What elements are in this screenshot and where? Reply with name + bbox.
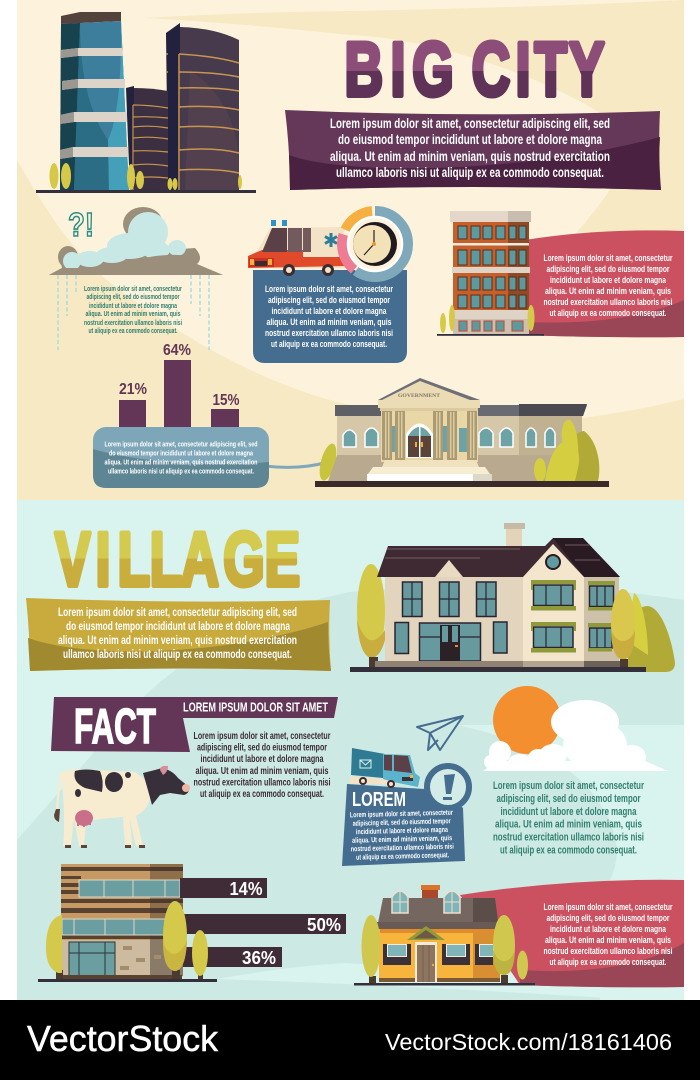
bar chart: horizontal percent bars: 50% <box>307 915 341 935</box>
bar chart: percent bars: 15% <box>212 392 240 409</box>
illustration: delivery truck <box>350 748 420 788</box>
text: fact body: incididunt ut labore et dolore magna <box>200 754 324 765</box>
footer: watermark bar <box>0 1000 700 1080</box>
bar chart: percent bars: 21% <box>119 381 147 398</box>
footer: watermark bar: VectorStock.com/18161406 <box>385 1029 672 1055</box>
banner: fact heading: LOREM IPSUM DOLOR SIT AMET <box>183 700 328 714</box>
text: cloud caption <box>84 284 182 335</box>
banner: big city intro: aliqua. Ut enim ad minim veniam, quis nostrud exercitation <box>330 149 610 164</box>
banner: village intro <box>26 598 331 671</box>
illustration: skyscrapers <box>36 12 256 193</box>
card: ambulance text: aliqua. Ut enim ad minim veniam, quis <box>266 316 392 327</box>
illustration: flat-roof building <box>61 864 183 980</box>
panel: village background <box>17 500 684 1000</box>
text: cloud caption: ut aliquip ex ea commodo consequat. <box>88 326 178 335</box>
banner: village intro: Lorem ipsum dolor sit amet, consectetur adipiscing elit, sed <box>58 605 297 619</box>
illustration: cottage <box>354 885 535 986</box>
illustration: cow <box>54 766 190 848</box>
banner: village intro: aliqua. Ut enim ad minim veniam, quis nostrud exercitation <box>58 633 297 647</box>
text: sun caption <box>493 780 644 856</box>
illustration: government building <box>315 378 609 487</box>
text: fact body: aliqua. Ut enim ad minim veniam, quis <box>196 766 329 777</box>
text: cloud caption: incididunt ut labore et dolore magna <box>89 301 178 310</box>
bar chart: horizontal percent bars: 14% <box>230 879 262 899</box>
banner: big city intro: do eiusmod tempor incididunt ut labore et dolore magna <box>338 132 602 147</box>
illustration: sun behind cloud <box>483 686 668 771</box>
card: chart text: do eiusmod tempor incididunt ut labore et dolore magna <box>109 448 254 458</box>
card: chart text <box>93 427 269 488</box>
card: lorem notice: ut aliquip ex ea commodo consequat. <box>356 850 449 862</box>
banner: fact heading: FACT <box>74 700 156 754</box>
card: ambulance text: Lorem ipsum dolor sit amet, consectetur <box>265 283 393 294</box>
text: fact body: ut aliquip ex ea commodo consequat. <box>200 789 324 800</box>
card: ambulance text: adipiscing elit, sed do eiusmod tempor <box>268 294 390 305</box>
card: lorem notice: Lorem ipsum dolor sit amet, consectetur <box>350 808 453 819</box>
footer: watermark bar: VectorStock <box>27 1018 219 1059</box>
text: cloud caption: Lorem ipsum dolor sit amet, consectetur <box>84 284 182 293</box>
text: cloud caption: nostrud exercitation ullamco laboris nisi <box>84 318 182 327</box>
card: lorem notice: aliqua. Ut enim ad minim veniam, quis <box>352 833 452 845</box>
illustration: trees and ground by flat building <box>38 901 217 982</box>
card: lorem notice: incididunt ut labore et dolore magna <box>356 825 449 836</box>
text: fact body: Lorem ipsum dolor sit amet, consectetur <box>194 731 331 742</box>
text: fact body <box>194 731 331 800</box>
card: ambulance text: ut aliquip ex ea commodo consequat. <box>271 338 387 349</box>
illustration: government building: GOVERNMENT <box>398 393 440 399</box>
panel: red text ribbon top <box>525 230 684 337</box>
card: lorem notice: LOREM <box>352 789 406 811</box>
banner: big city intro: ullamco laboris nisi ut aliquip ex ea commodo consequat. <box>336 165 604 180</box>
banner: big city intro <box>285 110 661 190</box>
text: fact body: nostrud exercitation ullamco laboris nisi <box>194 778 331 788</box>
bar chart: percent bars <box>119 342 240 430</box>
card: ambulance text: nostrud exercitation ullamco laboris nisi <box>265 327 393 338</box>
card: chart text: aliqua. Ut enim ad minim veniam, quis nostrud exercitation <box>104 458 258 466</box>
bar chart: horizontal percent bars: 36% <box>242 948 276 968</box>
bar chart: horizontal percent bars <box>180 878 346 968</box>
text: sun caption: adipiscing elit, sed do eiusmod tempor <box>496 793 641 805</box>
panel: big city background <box>17 0 684 500</box>
text: cloud caption: aliqua. Ut enim ad minim veniam, quis <box>86 309 180 318</box>
connector line <box>265 462 328 467</box>
icon: paper plane <box>417 716 463 750</box>
card: ambulance text <box>253 270 407 363</box>
illustration: storm cloud with rain <box>49 207 223 350</box>
text: cloud caption: adipiscing elit, sed do eiusmod tempor <box>86 292 180 301</box>
title: big city: BIG CITY <box>345 27 605 112</box>
illustration: brick apartment building <box>437 211 544 336</box>
card: lorem notice <box>342 766 469 866</box>
banner: village intro: do eiusmod tempor incididunt ut labore et dolore magna <box>66 619 290 633</box>
banner: village intro: ullamco laboris nisi ut aliquip ex ea commodo consequat. <box>63 647 292 661</box>
card: chart text: ullamco laboris nisi ut aliquip ex ea commodo consequat. <box>108 466 254 476</box>
illustration: village house <box>350 523 675 672</box>
illustration: ambulance <box>248 220 345 276</box>
chart: clock donut <box>342 211 408 277</box>
icon: question and exclamation marks: ?! <box>68 206 94 243</box>
bar chart: percent bars: 64% <box>163 342 191 359</box>
card: lorem notice: adipiscing elit, sed do eiusmod tempor <box>353 816 451 828</box>
title: village: VILLAGE <box>55 517 300 602</box>
panel: red text ribbon bottom <box>460 880 684 987</box>
card: chart text: Lorem ipsum dolor sit amet, consectetur adipiscing elit, sed <box>104 440 258 448</box>
text: fact body: adipiscing elit, sed do eiusmod tempor <box>197 742 327 754</box>
text: sun caption: aliqua. Ut enim ad minim veniam, quis <box>495 818 642 830</box>
text: sun caption: incididunt ut labore et dolore magna <box>500 806 637 818</box>
text: sun caption: ut aliquip ex ea commodo consequat. <box>500 844 637 856</box>
banner: fact heading <box>51 697 338 754</box>
card: ambulance text: incididunt ut labore et dolore magna <box>272 305 387 316</box>
icon: exclamation mark <box>443 774 455 800</box>
card: lorem notice: nostrud exercitation ullamco laboris nisi <box>351 842 454 853</box>
